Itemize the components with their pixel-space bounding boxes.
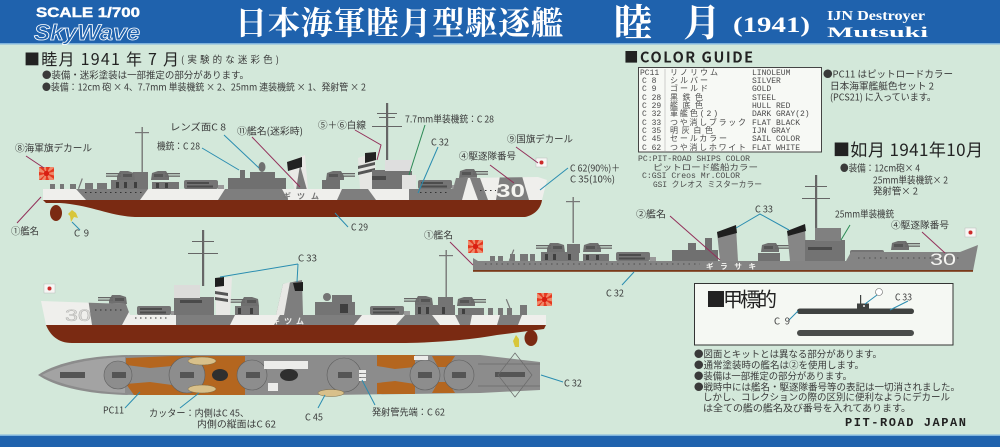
color table: FLAT WHITE [752,144,800,153]
lower profile and deck callouts: C 45 [305,410,323,424]
torpedo tubes [137,306,177,315]
lower profile and deck callouts: カッター：内側はC 45、 [149,406,249,420]
ship 1 callouts: C 32 [431,134,449,148]
front mast [802,175,830,235]
rudder [524,330,538,346]
aft deckhouses [541,244,609,261]
color table: 黒鉄色 [670,92,703,103]
hull upper camouflage band [41,301,546,325]
color key notes: PC:PIT-ROAD SHIPS COLOR [638,155,750,164]
panel: Ko-hyoteki midget submarine: C 33 [895,290,912,304]
bow detail [42,357,125,393]
english title line 1: IJN Destroyer [827,9,925,24]
heading: Kisaragi October 1941: 発射管× 2 [873,184,918,198]
bridge [174,285,214,315]
color table: セールカラー [670,134,727,144]
ship 1 callouts: C 29 [351,220,368,234]
hull name: ギ ラ サ キ [706,262,756,271]
torpedo tubes [616,252,656,261]
footnotes: ●通常塗装時の艦名は②を使用します。 [694,358,864,372]
color table: C 35 [642,127,661,136]
deck outline [38,355,540,395]
lower profile and deck callouts: 内側の縦面はC 62 [197,416,276,430]
year: (1941) [733,12,810,37]
funnel 2 [358,152,376,189]
color table: つや消しホワイト [670,142,746,153]
color table: リノリウム [670,68,718,78]
main title: 日本海軍睦月型駆逐艦 [235,5,563,41]
note lines: ●装備・迷彩塗装は一部推定の部分があります。 [42,68,249,82]
color table: STEEL [752,94,776,103]
color table: C 62 [642,144,661,153]
guns [106,171,135,180]
color table: C 9 [642,85,657,94]
color table: SILVER [752,77,781,86]
footnotes [694,346,960,414]
funnel 1 [287,155,308,190]
heading: Kisaragi October 1941 [833,136,983,198]
bow flag [536,158,547,167]
ship 1 callouts: C 9 [74,226,89,240]
company credit: PIT-ROAD JAPAN [845,416,966,430]
heading: Kisaragi October 1941: ■如月 1941年10月 [833,136,983,161]
scale label: SCALE 1/700 [36,5,140,20]
deckhouses [235,293,480,315]
hull [473,245,978,271]
funnels [717,224,806,261]
color table: C 28 [642,94,661,103]
color table: C 29 [642,102,661,111]
color table: 軍艦色(2) [670,108,718,119]
waterline [473,270,973,272]
camouflage ship name: キツム [272,317,304,326]
header band [0,0,1000,45]
submarine callouts [876,288,882,296]
ship 1 callouts: ⑪艦名(迷彩時) [237,124,303,138]
color table: 艦底色 [670,100,703,111]
color guide: C:GSI Creos Mr.COLOR [642,172,740,181]
labels: ①艦名 [424,228,453,242]
color guide heading: ■COLOR GUIDE [624,46,753,68]
ship 2 callouts: C 33 [755,202,773,216]
stern rails [478,353,540,397]
bridge [805,228,845,261]
bow flag [965,228,976,237]
color guide: ピットロード艦船カラー [653,162,758,173]
bottom band [0,434,1000,447]
lower profile and deck callouts [103,250,582,430]
funnel 1 [215,277,232,315]
ship name: 睦 月 [614,3,721,45]
ship 1 callouts: ⑨国旗デカール [507,132,573,146]
lower profile and deck callouts: 発射管先端：C 62 [372,404,445,418]
torpedo tubes [184,180,224,189]
ship 2: gray side profile [468,175,978,272]
submarine upper [797,295,914,314]
ship 2 callouts: 25mm単装機銃 [835,206,894,220]
aft flag [39,167,54,180]
funnel 2 [276,280,303,315]
color table: IJN GRAY [752,127,791,136]
aft deck clutter [490,249,535,261]
color table: つや消しブラック [670,117,746,128]
midship structure [228,162,340,189]
deck plan [38,353,540,397]
linoleum deck patches [126,355,455,395]
ship 1 callouts: ④駆逐隊番号 [459,148,516,162]
panel: Ko-hyoteki midget submarine [694,284,953,345]
heading: Mutsuki July 1941 [24,46,366,94]
ship 1 callouts: 7.7mm単装機銃：C 28 [405,112,494,126]
english title line 2: Mutsuki [827,25,928,41]
front mast [188,230,218,286]
aft deck clutter [50,178,107,189]
lower profile and deck callouts: PC11 [103,402,124,416]
heading: Mutsuki July 1941: ■睦月 1941 年 7 月 [24,46,179,70]
ship 2 callouts: C 32 [606,286,624,300]
heading: Mutsuki July 1941: ●装備：12cm 砲 × 4、7.7mm 単装機銃 × 2、25mm 連装機銃 × 1、発射管 × 2 [42,80,366,94]
color table: GOLD [752,85,771,94]
ship 1 callouts: ①艦名 [11,224,39,238]
color table: C 8 [642,77,657,86]
submarine lower [797,330,914,336]
PC11 note: ●PC11 はピットロードカラー [823,66,953,80]
ship 1: camouflaged side profile [39,103,550,222]
ship 3: camouflaged port profile [38,230,552,347]
ship 1 callouts: ⑤＋⑥白線 [318,118,366,132]
color table: FLAT BLACK [752,119,800,128]
PC11 note [823,66,953,104]
footnotes: ●図面とキットとは異なる部分があります。 [694,346,882,360]
cutters [188,357,344,396]
color guide [624,46,822,190]
footnotes: ●装備は一部推定の部分があります。 [694,368,852,382]
color table: 明灰白色 [670,125,713,136]
heading: Kisaragi October 1941: 25mm単装機銃× 2 [873,172,948,186]
lower hull [46,325,546,343]
lower profile and deck callouts: C 32 [564,376,582,390]
hull upper camouflage band [43,177,547,200]
color table [638,68,822,153]
color table: C 33 [642,119,661,128]
color guide: GSI クレオス ミスターカラー [653,180,762,190]
hull number: 30 [65,306,91,325]
guns [98,295,127,304]
aft deckhouses [111,172,179,189]
ship 1 callouts: レンズ面C 8 [170,120,226,134]
turret details [60,372,525,378]
PC11 note: 日本海軍艦艇色セット 2 [830,78,934,92]
panel heading: ■甲標的 [706,284,777,312]
aft flag [537,293,552,306]
ship 1 callouts: C 35(10%) [570,172,615,186]
rear mast [566,197,580,243]
turret circles [104,357,474,393]
color table: シルバー [670,76,708,86]
ship 1 callouts: 機銃：C 28 [157,138,200,152]
hull number: 30 [496,181,525,201]
ship 1 callouts: C 62(90%)＋ [570,160,620,174]
equipment notes: ●装備：12cm砲× 4 [840,160,920,174]
color table: DARK GRAY(2) [752,110,810,119]
rear mast [439,250,453,300]
color table: C 45 [642,135,661,144]
bow flag [44,284,55,293]
funnel tops [212,369,298,381]
rear mast [135,127,149,177]
propeller [68,210,78,222]
heading: Mutsuki July 1941: (実験的な迷彩色) [181,52,279,66]
labels: C 33 [298,250,317,264]
panel: Ko-hyoteki midget submarine: C 9 [774,314,790,328]
SkyWave logo: SkyWave [34,20,140,45]
guns [536,243,565,252]
front mast [372,103,402,165]
propeller [513,335,519,347]
PC11 note: (PCS21) に入っています。 [830,90,936,104]
midship structure [672,238,780,261]
footnotes: ●戦時中には艦名・駆逐隊番号等の表記は一切消されました。 [694,380,960,394]
leader lines [26,156,44,168]
color table: SAIL COLOR [752,135,800,144]
color table: ゴールド [670,83,708,94]
aft deck clutter [480,299,527,315]
footnotes: しかし、コレクションの際の区別に便利なようにデカール [703,390,950,404]
hull portholes [485,258,960,264]
bridge [372,160,416,190]
color table: PC11 [640,69,659,78]
rudder [50,205,62,221]
hull number: 30 [930,250,956,269]
white torpedo markings [264,356,428,391]
leader lines [220,264,298,282]
color table: C 32 [642,110,661,119]
footnotes: は全ての艦の艦名及び番号を入れてあります。 [703,400,911,414]
ship 1 callouts [11,112,620,240]
lower hull [43,200,542,217]
aft flag [468,240,483,253]
ship 2 callouts: ②艦名 [636,206,666,220]
ship 2 callouts: ④駆逐隊番号 [891,218,949,232]
ship 2 callouts [424,202,949,300]
color table: HULL RED [752,102,791,111]
labels: ⑧海軍旗デカール [15,140,92,154]
camouflage ship name: ギ ツ ム [283,192,319,201]
leader lines [450,242,473,265]
color table: LINOLEUM [752,69,791,78]
